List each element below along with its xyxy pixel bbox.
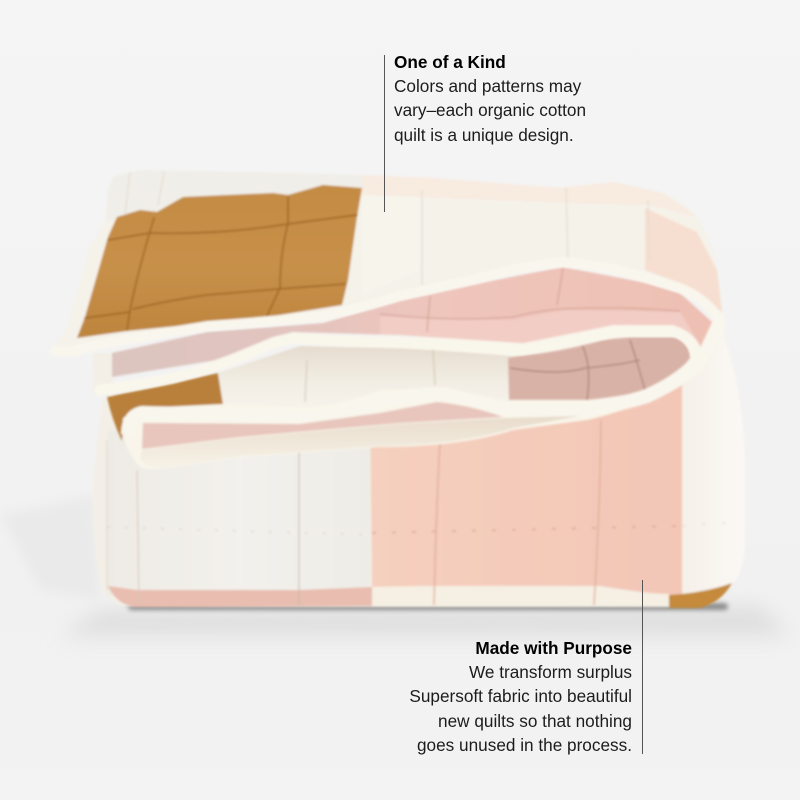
flap binding: [55, 262, 720, 351]
callout: made with purpose: [409, 638, 632, 755]
second binding: [100, 331, 699, 390]
flap silhouette: [51, 170, 723, 357]
mauve panel: [508, 337, 690, 400]
bottom cream strip: [372, 586, 669, 606]
lower fold: [107, 320, 723, 470]
cream panel: [218, 346, 523, 407]
callout: one of a kind: quilt is a unique design.: [394, 125, 574, 145]
callout: made with purpose: goes unused in the process.: [417, 735, 632, 755]
cream side block: [93, 353, 113, 395]
lighter lower band: [380, 310, 700, 345]
orange corner: [669, 583, 732, 608]
callout: made with purpose: new quilts so that nothing: [438, 711, 632, 731]
callout rule: one of a kind: [384, 55, 385, 212]
callout: one of a kind: One of a Kind: [394, 52, 506, 72]
quilt body: [93, 330, 745, 608]
cream panel seams: [433, 348, 435, 385]
callout: made with purpose: We transform surplus: [469, 662, 632, 682]
floor shadow: [0, 495, 790, 636]
callout: one of a kind: Colors and patterns may: [394, 76, 581, 96]
orange patch: [77, 185, 362, 338]
upper flap: [51, 170, 723, 357]
right white block: [682, 330, 745, 592]
callout: one of a kind: [394, 52, 586, 145]
orange corner of lower fold: [107, 373, 223, 441]
upper pink: [112, 267, 712, 377]
peach right block: [645, 208, 722, 312]
orange quilting: [85, 197, 357, 330]
seams: [107, 420, 742, 606]
pink block: [370, 370, 682, 596]
mauve seams: [510, 340, 645, 400]
peach top band: [362, 175, 697, 217]
lower pink underside: [142, 402, 503, 449]
grey top band: [107, 170, 362, 222]
callout: made with purpose: Supersoft fabric into beautiful: [409, 686, 632, 706]
upper underside: [93, 267, 712, 395]
callout: made with purpose: Made with Purpose: [475, 638, 632, 658]
third binding: [128, 322, 719, 434]
callout rule: made with purpose: [642, 580, 643, 754]
lip quilting: [140, 416, 580, 468]
white squares: [362, 195, 650, 295]
pink seams: [380, 268, 680, 332]
fold silhouette: [107, 320, 723, 470]
callout: one of a kind: vary–each organic cotton: [394, 100, 586, 120]
white block: [107, 430, 370, 595]
square seams: [125, 172, 650, 285]
bottom pink strip: [108, 586, 372, 607]
